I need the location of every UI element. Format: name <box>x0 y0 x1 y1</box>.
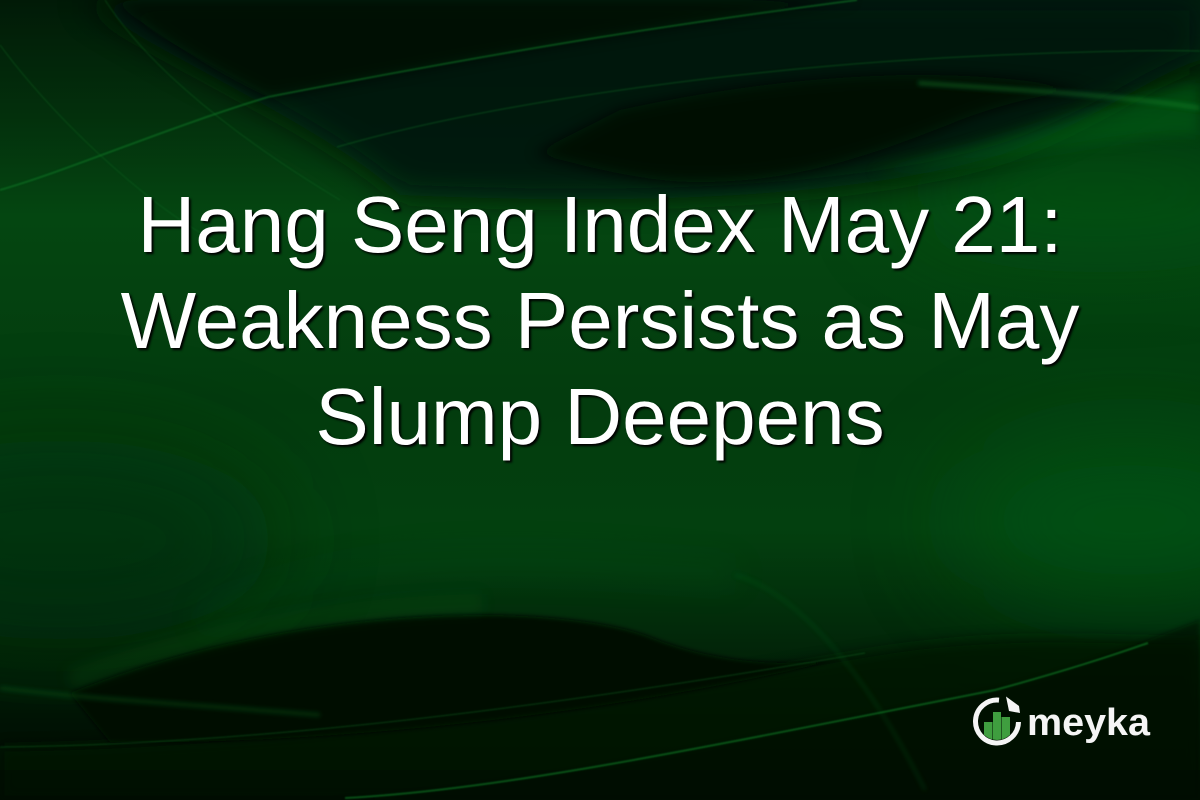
dark swoosh <box>535 75 1130 182</box>
bright band at top right <box>870 82 1200 172</box>
title: Hang Seng Index May 21: <box>137 180 1063 269</box>
top dark area <box>80 0 1200 199</box>
title: Weakness Persists as May <box>121 276 1079 365</box>
lower dark area <box>0 638 1200 800</box>
bottom band light streaks <box>70 603 482 680</box>
logo: meyka <box>973 696 1151 746</box>
dark hump <box>70 615 865 742</box>
title: Slump Deepens <box>315 372 885 461</box>
icon: ring with bars <box>976 696 1020 743</box>
title <box>121 180 1082 464</box>
wordmark: meyka <box>1027 702 1151 744</box>
